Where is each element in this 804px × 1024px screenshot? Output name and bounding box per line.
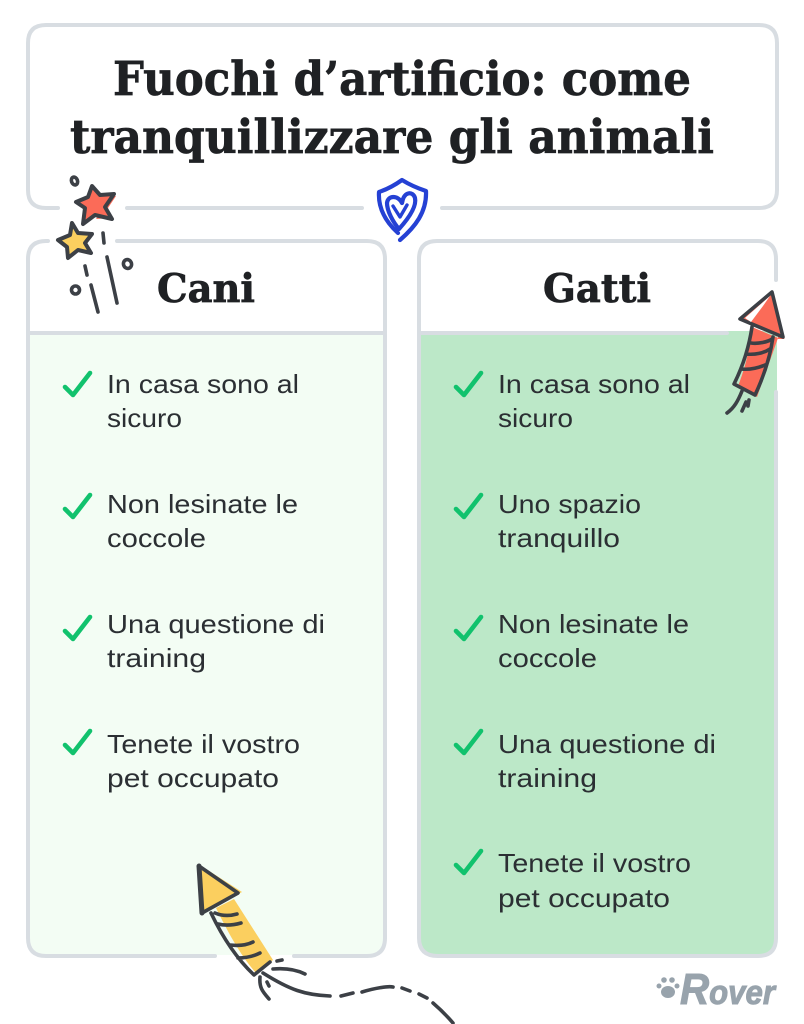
list: gatti: training	[498, 763, 597, 793]
heading: cani: Cani	[157, 266, 255, 312]
panel: gatti	[419, 241, 777, 956]
panel: cani	[28, 241, 385, 956]
list: gatti: tranquillo	[498, 523, 620, 553]
list: gatti: Tenete il vostro	[498, 848, 691, 878]
list: gatti: Uno spazio	[498, 489, 641, 519]
list: cani	[65, 369, 325, 793]
list: cani: Non lesinate le	[107, 489, 298, 519]
list: cani: training	[107, 643, 206, 673]
title: Fuochi d’artificio: come	[113, 52, 691, 107]
list: cani: In casa sono al	[107, 369, 299, 399]
list: cani: coccole	[107, 523, 206, 553]
title	[70, 52, 714, 165]
list: gatti	[456, 369, 716, 913]
list: cani: pet occupato	[107, 763, 279, 793]
icon: red rocket	[727, 292, 785, 413]
icon: paw	[656, 977, 680, 998]
list: gatti: pet occupato	[498, 883, 670, 913]
list: gatti: coccole	[498, 643, 597, 673]
list: gatti: sicuro	[498, 403, 573, 433]
list: gatti: In casa sono al	[498, 369, 690, 399]
list: cani: sicuro	[107, 403, 182, 433]
list: cani: Tenete il vostro	[107, 729, 300, 759]
heading: gatti: Gatti	[543, 266, 651, 312]
list: gatti: Non lesinate le	[498, 609, 689, 639]
title: tranquillizzare gli animali	[70, 110, 714, 165]
icon: yellow rocket with dashed trail	[199, 866, 453, 1023]
icon: shield with heart	[379, 180, 426, 240]
list: gatti: Una questione di	[498, 729, 716, 759]
logo: Rover: Rover	[680, 965, 777, 1014]
icon: stars and sparks	[58, 176, 133, 312]
title panel	[28, 25, 777, 208]
list: cani: Una questione di	[107, 609, 325, 639]
